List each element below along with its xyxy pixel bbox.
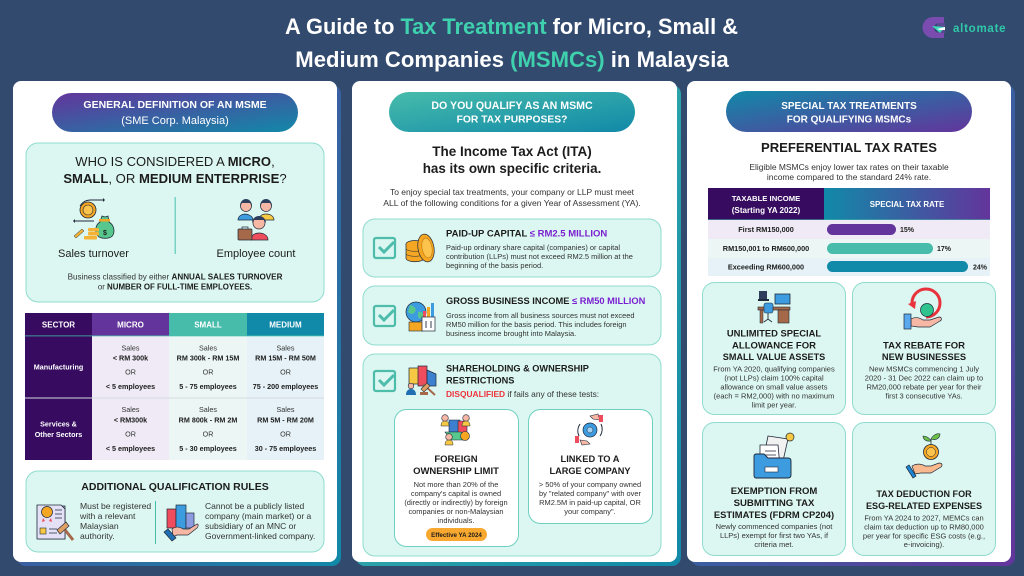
card: tax rebate: TAX REBATE FOR: [883, 340, 965, 352]
card: small value assets: ALLOWANCE FOR: [732, 340, 816, 352]
sector size table: Sales: [199, 405, 217, 414]
sector size table: 30 - 75 employees: [255, 444, 316, 453]
sector size table: OR: [203, 430, 213, 438]
criterion text: GROSS BUSINESS INCOME ≤ RM50 MILLION: [446, 296, 646, 306]
card: tax rebate: New MSMCs commencing 1 July: [869, 364, 979, 374]
text: registration rule: with a relevant: [79, 511, 136, 521]
tax rate table: First RM150,000: [738, 225, 794, 234]
sector size table: OR: [280, 368, 291, 376]
sector size table: Manufacturing: [34, 362, 83, 372]
classification note: [68, 272, 283, 292]
heading pill: qualify: DO YOU QUALIFY AS AN MSMC: [431, 100, 593, 112]
criterion text: Paid-up ordinary share capital (companies) or capital: [446, 243, 620, 252]
card: linked to a large company: LARGE COMPANY: [550, 466, 630, 476]
text: listing rule: Government-linked company.: [205, 531, 315, 541]
card: exemption from tax estimates: SUBMITTING TAX: [734, 498, 815, 509]
icon: buildings in hand: [164, 505, 198, 541]
preferential intro: [749, 162, 949, 182]
criterion: paid-up capital: [363, 219, 661, 277]
icon: handshake cycle: [575, 414, 603, 445]
text: listing rule: Cannot be a publicly listed: [205, 501, 305, 511]
icon: office desk: [758, 291, 790, 323]
text: registration rule: Must be registered: [80, 501, 151, 511]
icon: check: [374, 306, 395, 326]
icon: buildings and gavel: [406, 366, 436, 395]
tax rate table: [708, 188, 990, 276]
sector size table: SECTOR: [42, 320, 75, 330]
criteria heading: has its own specific criteria.: [423, 161, 601, 176]
heading pill: general definition: GENERAL DEFINITION OF AN MSME: [83, 99, 267, 111]
card: exemption from tax estimates: EXEMPTION FROM: [731, 486, 817, 497]
sector size table: < 5 employees: [106, 382, 155, 391]
text: registration rule: [79, 501, 151, 541]
bar: 24%: 24%: [973, 264, 988, 272]
additional qualification rules: [26, 471, 324, 552]
criterion text: PAID-UP CAPITAL ≤ RM2.5 MILLION: [446, 228, 607, 240]
who is considered box: [26, 143, 324, 302]
tax rate table: Exceeding RM600,000: [728, 262, 804, 272]
sector size table: RM 5M - RM 20M: [257, 416, 314, 424]
shareholding heading: SHAREHOLDING & OWNERSHIP: [446, 364, 589, 374]
card: ESG tax deduction: TAX DEDUCTION FOR: [876, 489, 972, 499]
card: ESG tax deduction: ESG-RELATED EXPENSES: [866, 501, 982, 511]
sector size table: Services &: [40, 420, 77, 428]
card: exemption from tax estimates: ESTIMATES (FDRM CP204): [714, 509, 834, 520]
text: listing rule: company (main market) or a: [205, 511, 312, 521]
criteria heading: The Income Tax Act (ITA): [432, 144, 592, 159]
label: employee count: Employee count: [217, 248, 295, 260]
criterion text: [446, 296, 646, 338]
classification note: Business classified by either ANNUAL SALES TURNOVER: [68, 272, 283, 282]
tax rate table: SPECIAL TAX RATE: [870, 200, 944, 209]
who is considered heading: SMALL, OR MEDIUM ENTERPRISE?: [63, 171, 287, 186]
card: small value assets: From YA 2020, qualifying companies: [713, 364, 835, 374]
preferential heading: PREFERENTIAL TAX RATES: [761, 140, 937, 155]
heading pill: general definition: [52, 93, 298, 132]
card: small value assets: limit per year.: [752, 400, 796, 410]
badge: effective YA 2024: Effective YA 2024: [431, 532, 482, 539]
intro text: To enjoy special tax treatments, your company or LLP must meet: [390, 187, 635, 197]
sector size table: 75 - 200 employees: [253, 382, 318, 391]
card: foreign ownership limit: OWNERSHIP LIMIT: [413, 466, 499, 477]
criterion text: business income brought into Malaysia.: [446, 329, 576, 338]
divider: [155, 501, 156, 544]
sector size table: [25, 313, 324, 460]
card: tax rebate: 2020 - 31 Dec 2022 can claim up to: [865, 374, 983, 382]
sector size table: MICRO: [117, 320, 144, 330]
icon: ownership: [441, 415, 470, 445]
card: linked to a large company: by "related company" with over: [539, 489, 642, 498]
criteria heading: [423, 144, 601, 176]
title: Medium Companies (MSMCs) in Malaysia: [295, 47, 729, 72]
card: ESG tax deduction: e-invoicing).: [904, 540, 944, 549]
card: linked to a large company: > 50% of your company owned: [539, 480, 641, 489]
sector size table: SMALL: [194, 320, 222, 330]
heading pill: qualify: [389, 92, 635, 132]
sector size table: 5 - 30 employees: [179, 444, 237, 453]
card: ESG tax deduction: From YA 2024 to 2027, MEMCs can: [864, 514, 984, 522]
criterion text: contribution (LLPs) must not exceed RM2.5 million at the: [446, 252, 633, 261]
card: exemption from tax estimates: criteria met.: [754, 540, 794, 549]
card: linked to a large company: LINKED TO A: [561, 454, 620, 464]
criterion text: RM50 million for the basis period. This includes foreign: [446, 320, 627, 329]
icon: check: [374, 238, 395, 258]
icon: folder with documents: [754, 433, 794, 478]
sector size table: MEDIUM: [269, 320, 302, 330]
sector size table: OR: [203, 368, 213, 376]
text: listing rule: subsidiary of an MNC or: [205, 521, 296, 531]
panel: qualification: [352, 81, 681, 566]
sector size table: < RM 300k: [113, 354, 148, 362]
preferential intro: income compared to the standard 24% rate.: [767, 172, 931, 182]
card: tax rebate: first 3 consecutive YAs.: [885, 392, 963, 400]
intro text: [383, 187, 641, 208]
icon: plant coin on hand: [906, 434, 942, 478]
card: small value assets: allowance on small value assets: [720, 382, 828, 392]
card: ESG tax deduction: [852, 422, 996, 556]
who is considered heading: [63, 154, 287, 186]
sector size table: OR: [125, 430, 136, 438]
sector size table: OR: [125, 368, 136, 376]
heading pill: special treatments: [726, 91, 972, 132]
card: small value assets: [702, 282, 846, 414]
card: small value assets: (not LLPs) claim 100% capital: [724, 374, 824, 382]
text: listing rule: [205, 501, 315, 541]
sector size table: RM 800k - RM 2M: [179, 416, 237, 424]
sector size table: Sales: [199, 344, 217, 352]
logo: altomate: [923, 17, 1006, 38]
card: foreign ownership limit: company's capital is owned: [411, 489, 501, 498]
icon: rebate hand: [904, 289, 941, 329]
card: ESG tax deduction: claim tax deduction up to RM80,000: [864, 522, 984, 532]
card: small value assets: (each = RM2,000) with no maximum: [714, 392, 834, 400]
shareholding heading: DISQUALIFIED if fails any of these tests:: [446, 389, 599, 399]
sector size table: < 5 employees: [106, 444, 155, 453]
icon: globe and chart: [406, 302, 435, 331]
criterion text: Gross income from all business sources must not exceed: [446, 311, 634, 320]
sector size table: RM 300k - RM 15M: [177, 354, 239, 362]
sector size table: Sales: [122, 344, 140, 352]
card: exemption from tax estimates: [702, 422, 846, 556]
text: registration rule: authority.: [80, 531, 115, 541]
preferential intro: Eligible MSMCs enjoy lower tax rates on their taxable: [749, 162, 949, 172]
card: tax rebate: NEW BUSINESSES: [882, 352, 966, 362]
sector size table: 5 - 75 employees: [179, 382, 237, 391]
shareholding heading: [446, 364, 599, 399]
sector size table: OR: [280, 430, 291, 438]
tax rate table: RM150,001 to RM600,000: [723, 244, 809, 253]
card: foreign ownership limit: [394, 410, 518, 546]
card: tax rebate: [852, 282, 996, 414]
card: exemption from tax estimates: LLPs) exempt for first two YAs, if: [720, 531, 829, 540]
bar: 24%: [827, 261, 988, 272]
bar: 15%: [827, 224, 915, 235]
bar: 15%: 15%: [900, 227, 915, 234]
heading pill: general definition: (SME Corp. Malaysia): [121, 115, 229, 127]
title: A Guide to Tax Treatment for Micro, Small &: [285, 14, 738, 39]
criterion: shareholding: [363, 354, 661, 556]
card: foreign ownership limit: FOREIGN: [434, 454, 478, 465]
who is considered heading: WHO IS CONSIDERED A MICRO,: [75, 154, 275, 169]
criterion text: beginning of the basis period.: [446, 261, 543, 270]
card: ESG tax deduction: per year for specific ESG costs (e.g.,: [863, 532, 985, 540]
bar: 17%: 17%: [937, 246, 952, 253]
intro text: ALL of the following conditions for a given Year of Assessment (YA).: [383, 198, 641, 208]
card: linked to a large company: your company".: [564, 507, 616, 516]
card: linked to a large company: RM2.5M in paid-up capital, OR: [539, 498, 641, 507]
sector size table: Sales: [277, 344, 295, 352]
card: small value assets: SMALL VALUE ASSETS: [723, 352, 825, 362]
card: foreign ownership limit: individuals.: [438, 516, 474, 525]
icon: coins: [406, 233, 436, 263]
rules heading: ADDITIONAL QUALIFICATION RULES: [81, 481, 269, 493]
tax rate table: TAXABLE INCOME: [732, 194, 800, 203]
card: small value assets: UNLIMITED SPECIAL: [727, 328, 821, 338]
heading pill: special treatments: FOR QUALIFYING MSMCs: [787, 114, 912, 126]
sector size table: < RM300k: [114, 416, 147, 424]
icon: sales turnover: [73, 198, 114, 240]
criterion: gross income: [363, 286, 661, 345]
card: linked to a large company: [528, 410, 652, 524]
divider: [174, 197, 176, 254]
heading pill: special treatments: SPECIAL TAX TREATMENTS: [781, 101, 917, 112]
panel: general definition: [13, 81, 341, 566]
criterion text: [446, 228, 633, 270]
text: registration rule: Malaysian: [80, 521, 119, 531]
classification note: or NUMBER OF FULL-TIME EMPLOYEES.: [98, 282, 252, 292]
tax rate table: (Starting YA 2022): [732, 206, 801, 215]
card: exemption from tax estimates: Newly commenced companies (not: [716, 522, 833, 531]
logo: altomate: altomate: [953, 23, 1006, 35]
card: foreign ownership limit: Not more than 20% of the: [414, 480, 498, 489]
card: foreign ownership limit: companies or non-Malaysian: [408, 507, 504, 516]
sector size table: Other Sectors: [35, 430, 82, 439]
card: foreign ownership limit: (directly or indirectly) by foreign: [404, 498, 508, 507]
card: tax rebate: RM20,000 rebate per year for their: [866, 382, 982, 392]
label: sales turnover: Sales turnover: [58, 248, 129, 260]
sector size table: RM 15M - RM 50M: [255, 354, 316, 362]
bar: 17%: [827, 243, 952, 254]
sector size table: Sales: [277, 405, 295, 414]
sector size table: Sales: [122, 405, 140, 414]
icon: employees: [238, 199, 274, 240]
heading pill: qualify: FOR TAX PURPOSES?: [457, 114, 567, 126]
icon: check: [374, 371, 395, 391]
panel: special tax treatments: [687, 81, 1015, 566]
icon: certificate and gavel: [37, 505, 73, 540]
shareholding heading: RESTRICTIONS: [446, 376, 514, 386]
icon: sales turnover: $: [103, 230, 107, 237]
title: [285, 14, 738, 72]
